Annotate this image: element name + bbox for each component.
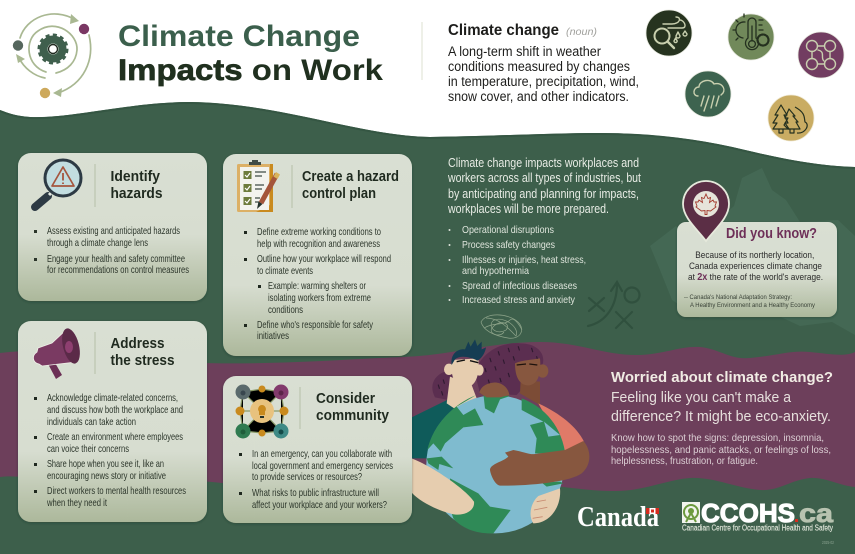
eco-anxiety text block: hopelessness, and panic attacks, or feelings of loss,: [611, 444, 831, 456]
eco-anxiety text block: Feeling like you can't make a: [611, 390, 792, 406]
eco-anxiety text block: helplessness, frustration, or fatigue.: [611, 455, 758, 467]
globe: [426, 393, 565, 533]
heading: the stress: [110, 353, 174, 369]
icon: wind and magnifier: [646, 10, 692, 56]
icon: megaphone: [33, 327, 83, 379]
purple band: [0, 342, 855, 493]
title: Climate Change: [118, 20, 360, 53]
doodle: strategy arrow: [588, 282, 640, 328]
impacts bullet list: Illnesses or injuries, heat stress,: [462, 254, 586, 266]
icon: rain cloud: [685, 71, 731, 117]
heading: [110, 336, 174, 369]
bullet list: Acknowledge climate-related concerns,: [47, 392, 178, 404]
eco-anxiety text block: [611, 369, 833, 467]
bullet list: for recommendations on control measures: [47, 264, 189, 276]
bullet list: to climate events: [257, 265, 313, 277]
heading: Identify: [110, 169, 160, 185]
eco-anxiety text block: difference? It might be eco-anxiety.: [611, 409, 831, 425]
bullet list: to provide services or resources?: [252, 471, 362, 483]
bullet list: through a climate change lens: [47, 237, 148, 249]
icon: clipboard: [237, 160, 280, 212]
bullet list: [34, 392, 186, 509]
CCOHS logo: [682, 498, 834, 532]
impacts bullet list: Process safety changes: [462, 239, 555, 251]
heading: hazards: [110, 186, 162, 202]
middle intro text: [447, 156, 641, 216]
icon: forest fire: [768, 95, 814, 141]
date code: 2025-02: [822, 540, 834, 545]
fact text: Canada experiences climate change: [689, 261, 822, 272]
definition text block: Climate change: [448, 22, 559, 39]
CCOHS logo: CCOHS: [701, 498, 795, 528]
panel: consider community: [223, 376, 412, 523]
fact text: [688, 250, 823, 283]
bullet list: conditions: [268, 304, 303, 316]
bullet list: Define extreme working conditions to: [257, 226, 381, 238]
middle intro text: workers across all types of industries, but: [447, 171, 641, 185]
definition text block: in temperature, precipitation, wind,: [448, 74, 639, 89]
bullet list: when they need it: [46, 497, 107, 509]
bullet list: Outline how your workplace will respond: [257, 253, 391, 265]
fact text: at 2x the rate of the world's average.: [688, 271, 823, 283]
bullet list: initiatives: [257, 330, 289, 342]
doodle: tangled scribble: [481, 315, 522, 338]
bullet list: Example: warming shelters or: [268, 280, 366, 292]
definition text block: conditions measured by changes: [448, 59, 630, 74]
bullet list: [34, 225, 189, 276]
Canada wordmark: Canada: [577, 502, 659, 533]
bullet list: encouraging news story or initiative: [47, 470, 166, 482]
title: Impacts on Work: [118, 54, 383, 87]
bullet list: Engage your health and safety committee: [47, 253, 185, 265]
heading: community: [316, 408, 389, 424]
hands and arms: [412, 383, 589, 523]
fact text: Because of its northerly location,: [695, 250, 814, 261]
icon: map pin with maple leaf: [683, 181, 729, 241]
bullet list: Share hope when you see it, like an: [47, 458, 164, 470]
source: [684, 294, 816, 309]
bullet list: [239, 448, 393, 511]
heading: Did you know?: [726, 226, 817, 242]
eco-anxiety text block: Know how to spot the signs: depression, insomnia,: [611, 432, 824, 444]
bullet list: What risks to public infrastructure will: [252, 487, 379, 499]
middle intro text: Climate change impacts workplaces and: [448, 156, 639, 170]
bullet list: Assess existing and anticipated hazards: [47, 225, 180, 237]
definition text block: [448, 22, 639, 104]
bullet list: Create an environment where employees: [47, 431, 183, 443]
source: -- Canada's National Adaptation Strategy:: [684, 294, 792, 301]
definition text block: A long-term shift in weather: [448, 44, 601, 59]
middle intro text: workplaces will be more prepared.: [447, 202, 609, 216]
panel: identify hazards: [18, 153, 207, 301]
source: A Healthy Environment and a Healthy Economy: [690, 302, 816, 309]
bullet list: Direct workers to mental health resources: [47, 485, 186, 497]
icon: magnifier with warning: [35, 160, 81, 207]
heading: [110, 169, 162, 202]
map of Canada watermark: [650, 168, 855, 335]
definition text block: (noun): [566, 26, 597, 38]
woman and man behind the globe: [412, 339, 584, 458]
title: [118, 20, 383, 87]
icon: thermometer: [728, 14, 774, 60]
eco-anxiety text block: Worried about climate change?: [611, 369, 833, 386]
bullet list: local government and emergency services: [252, 460, 393, 472]
panel: create a hazard control plan: [223, 154, 412, 356]
illustration: two people holding the globe: [412, 339, 589, 533]
heading: control plan: [302, 186, 376, 202]
bullet list: In an emergency, can you collaborate with: [252, 448, 392, 460]
middle intro text: by anticipating and planning for impacts,: [448, 187, 639, 201]
panel: did you know: [677, 181, 837, 317]
icon: community network: [236, 384, 288, 438]
icon: connected weather: [798, 32, 844, 78]
bullet list: isolating workers from extreme: [268, 292, 371, 304]
impacts bullet list: [448, 224, 586, 306]
bullet list: and discuss how both the workplace and: [47, 404, 183, 416]
heading: [302, 169, 399, 202]
impacts bullet list: and hypothermia: [462, 265, 529, 277]
bullet list: individuals can take action: [47, 416, 136, 428]
white header with wave edge: [0, 0, 855, 167]
bullet list: affect your workplace and your workers?: [252, 499, 387, 511]
impacts bullet list: Operational disruptions: [462, 224, 554, 236]
bullet list: [244, 226, 391, 342]
heading: [316, 391, 389, 424]
heading: Create a hazard: [302, 169, 399, 185]
heading: Address: [110, 336, 164, 352]
definition text block: snow cover, and other indicators.: [448, 89, 629, 104]
CCOHS logo: ca: [799, 498, 834, 528]
bullet list: help with recognition and awareness: [257, 238, 380, 250]
panel: address the stress: [18, 321, 207, 522]
impacts bullet list: Increased stress and anxiety: [462, 294, 576, 306]
impacts bullet list: Spread of infectious diseases: [462, 280, 577, 292]
heading: Consider: [316, 391, 375, 407]
logo: gear and cycle: [13, 14, 91, 98]
bullet list: can voice their concerns: [47, 443, 129, 455]
bullet list: Define who's responsible for safety: [257, 319, 374, 331]
